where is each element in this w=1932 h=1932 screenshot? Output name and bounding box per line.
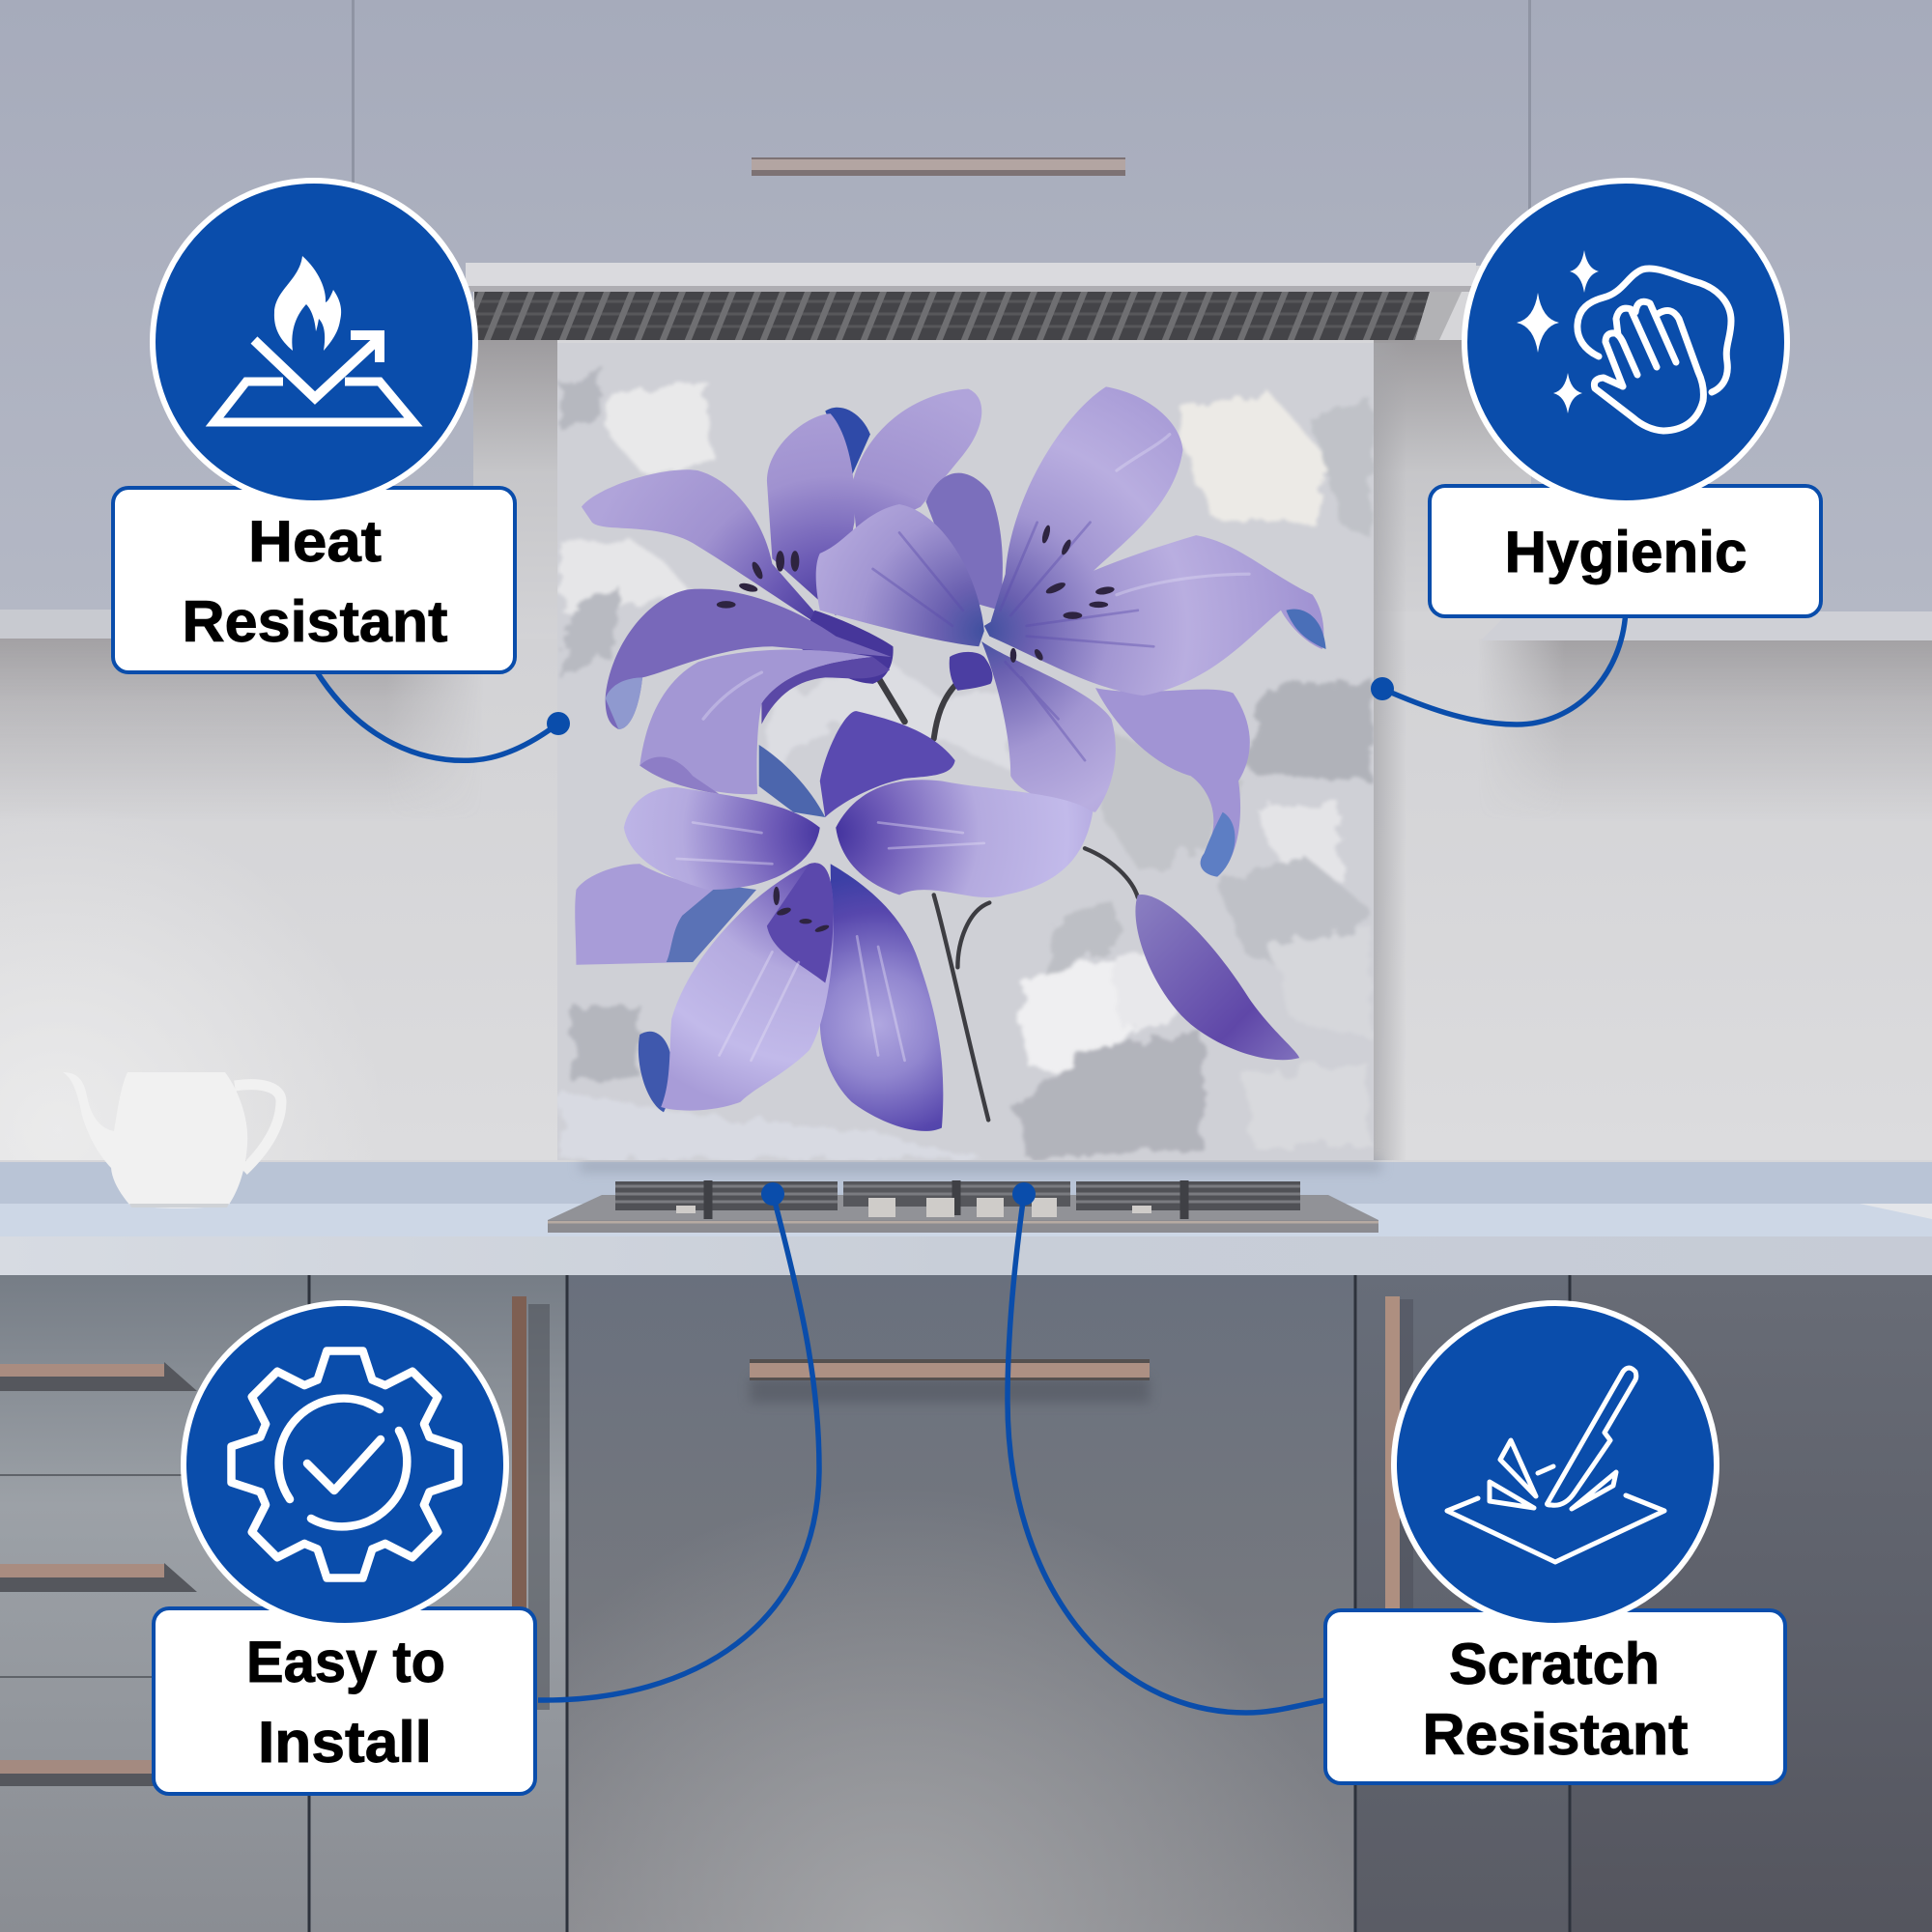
heading: Heat bbox=[248, 509, 382, 574]
teapot bbox=[63, 1072, 281, 1208]
label box bbox=[154, 1608, 535, 1794]
painted lily panel bbox=[557, 343, 1374, 1160]
lily bud bbox=[1135, 895, 1299, 1060]
painting background brushwork bbox=[560, 367, 1371, 1159]
range hood bbox=[466, 263, 1476, 340]
counter bbox=[0, 1160, 1932, 1275]
heading bbox=[246, 1630, 445, 1775]
stems bbox=[878, 677, 1138, 1120]
lower cabinets bbox=[0, 1275, 1932, 1932]
heading bbox=[1422, 1632, 1689, 1767]
connector: hygienic bbox=[1371, 610, 1626, 724]
icon: gear with check mark bbox=[184, 1303, 506, 1626]
lily flower: lower bbox=[575, 711, 1093, 1131]
heading: Install bbox=[258, 1710, 432, 1775]
label box bbox=[113, 488, 515, 672]
heading bbox=[182, 509, 448, 654]
icon: knife scratching surface bbox=[1394, 1303, 1717, 1626]
upper cabinets bbox=[0, 0, 1932, 639]
icon: flame deflecting off surface bbox=[153, 181, 475, 503]
petal brush streaks bbox=[677, 435, 1249, 1061]
lily stamens bbox=[717, 525, 1115, 933]
panel: hygienic bbox=[1430, 181, 1821, 616]
icon: hand wiping cloth with sparkles bbox=[1464, 181, 1787, 503]
panel: heat resistant bbox=[113, 181, 515, 672]
panel: easy to install bbox=[154, 1303, 535, 1794]
heading: Resistant bbox=[182, 589, 448, 654]
painting brush texture bbox=[557, 343, 1374, 1160]
heading: Hygienic bbox=[1505, 520, 1747, 584]
heading: Scratch bbox=[1449, 1632, 1660, 1696]
label box bbox=[1325, 1610, 1785, 1783]
connector: scratch resistant bbox=[1008, 1182, 1325, 1713]
connector: easy to install bbox=[538, 1182, 819, 1700]
cooktop bbox=[548, 1180, 1378, 1233]
panel: scratch resistant bbox=[1325, 1303, 1785, 1783]
lily flower: upper left bbox=[582, 388, 981, 794]
label box bbox=[1430, 486, 1821, 616]
wall bbox=[0, 340, 1932, 1160]
heading: Easy to bbox=[246, 1630, 445, 1694]
heading: Resistant bbox=[1422, 1702, 1689, 1767]
lily flower: right bbox=[816, 386, 1326, 877]
connector: heat resistant bbox=[316, 670, 570, 760]
